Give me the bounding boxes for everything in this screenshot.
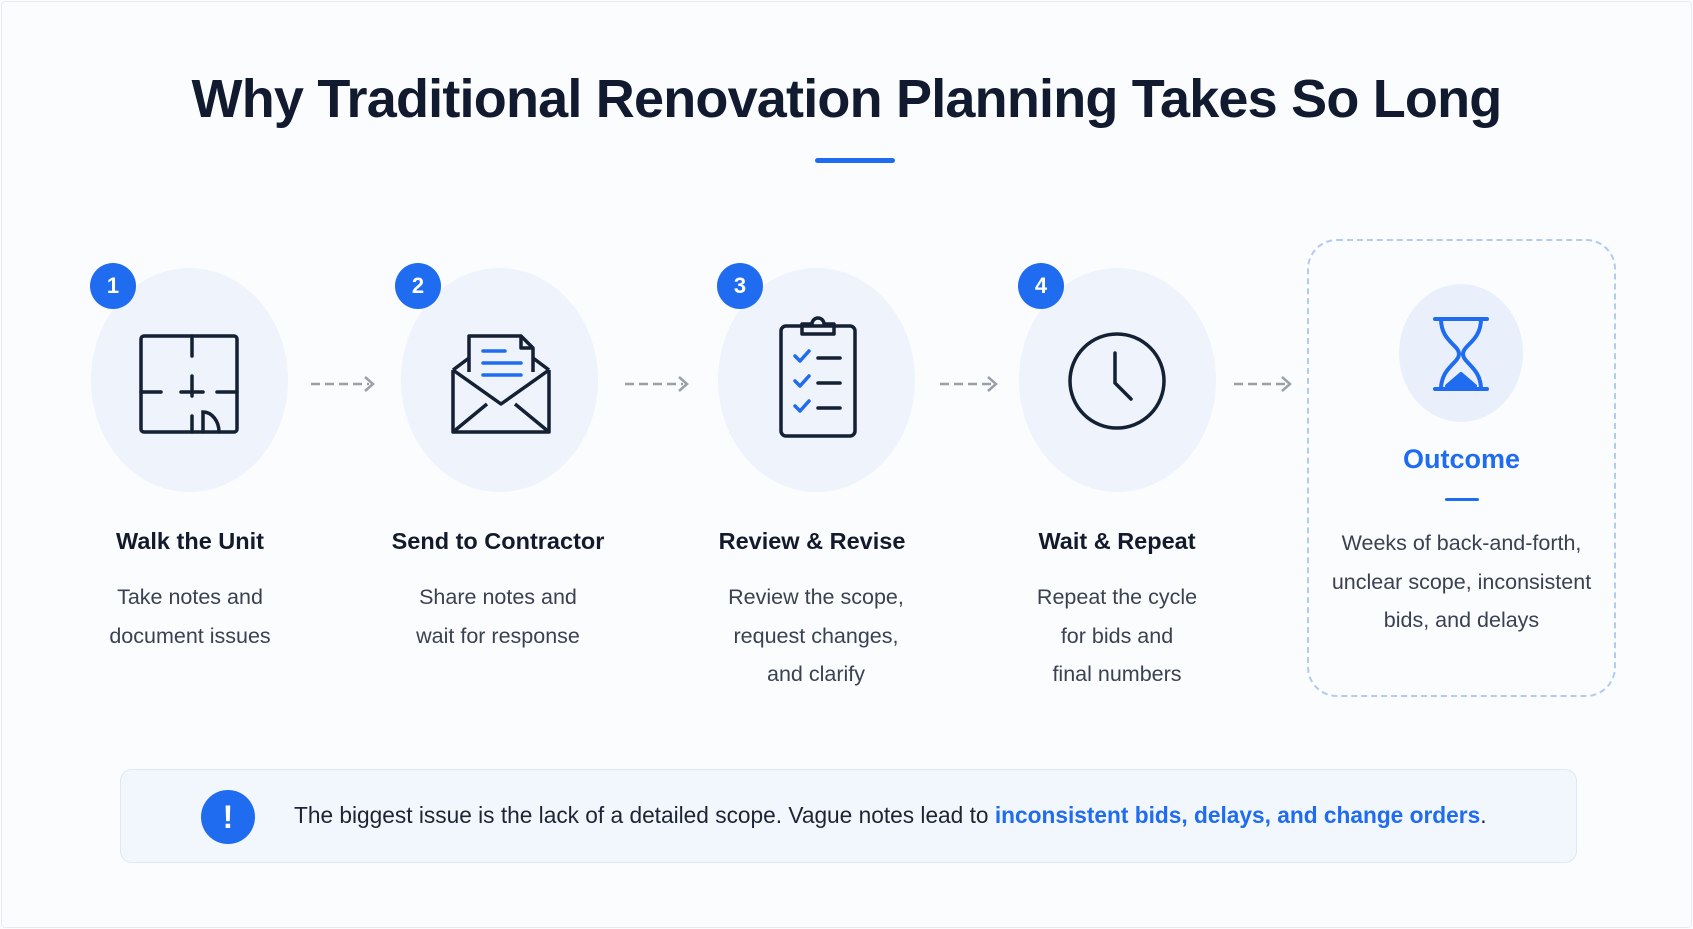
text: 4 bbox=[1035, 273, 1047, 298]
text: Send to Contractor bbox=[392, 528, 604, 554]
text: final numbers bbox=[1052, 662, 1182, 686]
callout: key issue bbox=[120, 769, 1577, 863]
outcome text bbox=[1332, 531, 1592, 632]
panel: outcome bbox=[1307, 239, 1616, 697]
text: 1 bbox=[107, 273, 119, 298]
text: Review & Revise bbox=[719, 528, 905, 554]
arrow 4 bbox=[1234, 376, 1292, 392]
text: Review the scope, bbox=[728, 585, 904, 609]
step 2 bbox=[392, 263, 604, 648]
step 3 bbox=[717, 263, 915, 686]
text: Share notes and bbox=[419, 585, 577, 609]
text: 3 bbox=[734, 273, 746, 298]
arrow 1 bbox=[311, 376, 375, 392]
outcome text: unclear scope, inconsistent bbox=[1332, 570, 1591, 594]
text: document issues bbox=[109, 624, 271, 648]
text: for bids and bbox=[1061, 624, 1173, 648]
outcome text: Weeks of back-and-forth, bbox=[1342, 531, 1581, 555]
text: request changes, bbox=[734, 624, 898, 648]
step 1 bbox=[90, 263, 288, 648]
text: 2 bbox=[412, 273, 424, 298]
outcome heading: Outcome bbox=[1403, 444, 1520, 474]
icon: exclamation bbox=[201, 790, 255, 844]
step 4 bbox=[1018, 263, 1216, 686]
outcome text: bids, and delays bbox=[1384, 608, 1539, 632]
icon: clipboard bbox=[779, 316, 857, 438]
icon: floor plan bbox=[139, 334, 239, 434]
arrow 3 bbox=[940, 376, 998, 392]
text: Wait & Repeat bbox=[1038, 528, 1196, 554]
text: and clarify bbox=[767, 662, 865, 686]
icon: hourglass bbox=[1399, 284, 1523, 422]
title: Why Traditional Renovation Planning Takes So Long bbox=[192, 69, 1501, 129]
callout text: The biggest issue is the lack of a detailed scope. Vague notes lead to inconsistent bids, delays, and change orders. bbox=[294, 802, 1487, 828]
icon: clock bbox=[1068, 332, 1166, 430]
text: Repeat the cycle bbox=[1037, 585, 1197, 609]
icon: exclamation: ! bbox=[223, 799, 233, 835]
text: Walk the Unit bbox=[116, 528, 264, 554]
text: wait for response bbox=[416, 624, 580, 648]
icon: envelope bbox=[451, 334, 551, 434]
arrow 2 bbox=[625, 376, 689, 392]
text: Take notes and bbox=[117, 585, 263, 609]
